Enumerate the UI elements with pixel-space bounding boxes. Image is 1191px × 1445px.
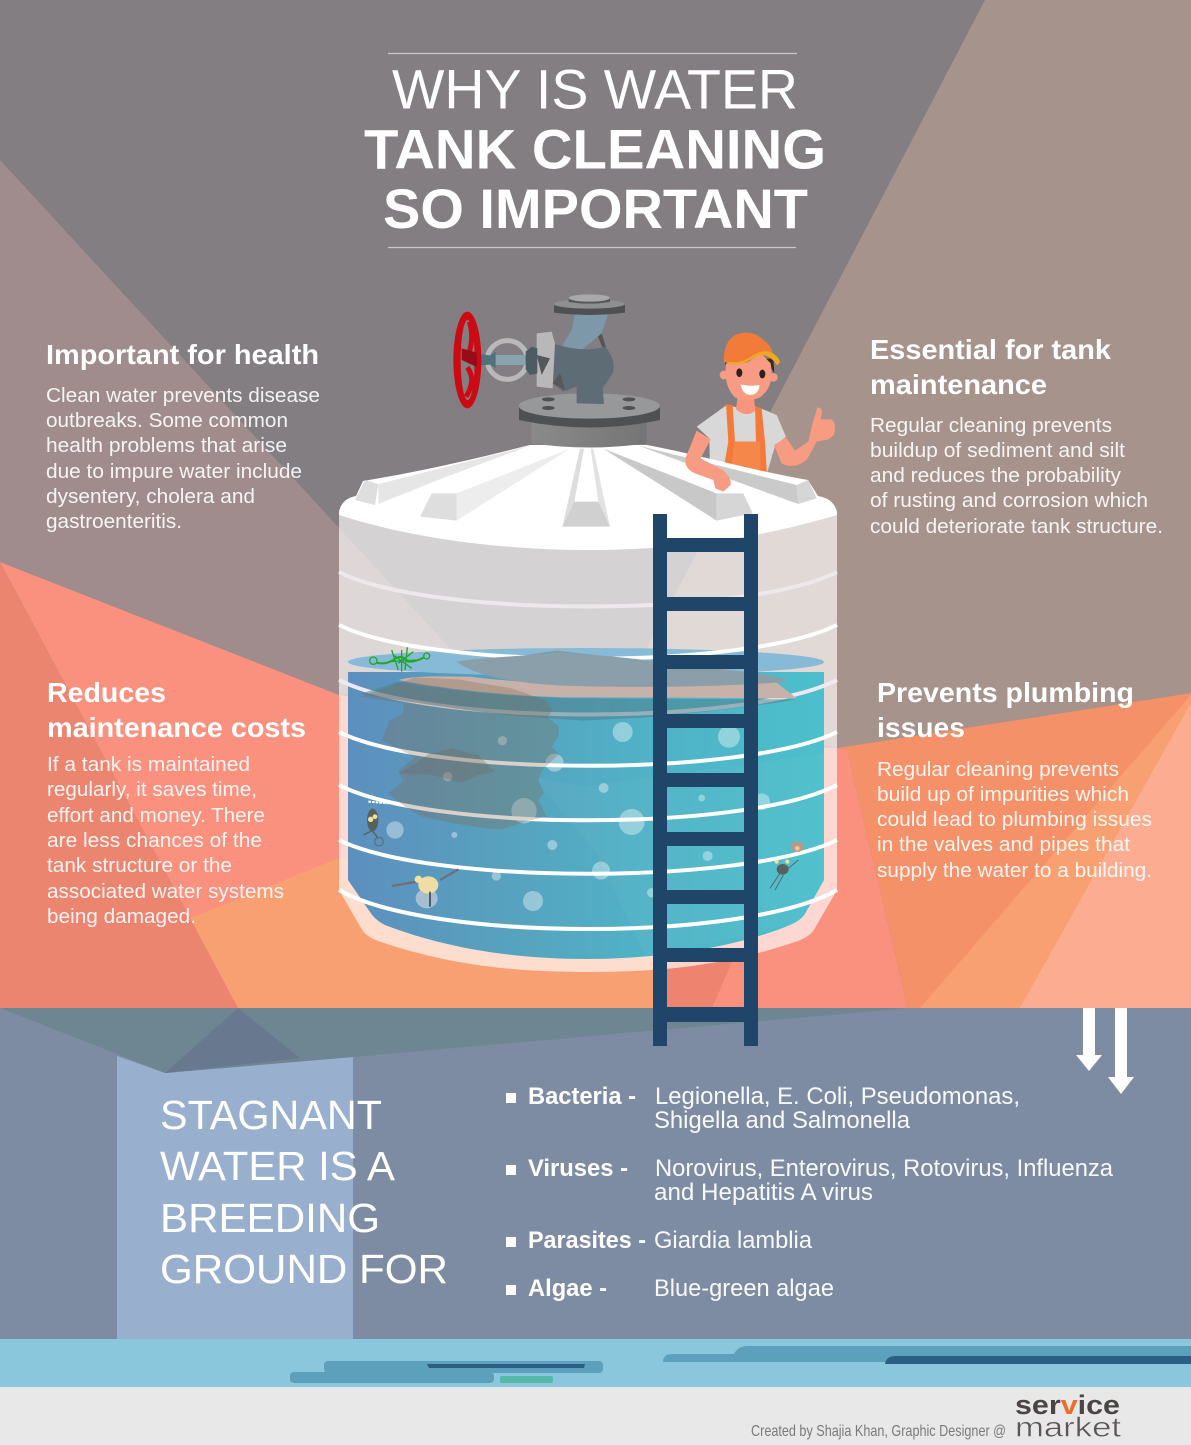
heading: stagnant water: STAGNANT [160,1092,382,1138]
water surface ellipse [348,648,824,676]
neck [736,398,755,414]
title block: WHY IS WATER [392,58,798,120]
smile [741,384,760,395]
logo: service market [1015,1390,1121,1442]
title block [364,54,826,248]
bubbles [386,722,770,911]
text block: essential for tank maintenance: of rusting and corrosion which [870,489,1148,512]
cap [724,333,773,363]
item: bacteria: Legionella, E. Coli, Pseudomonas, [655,1083,1020,1110]
arrows pointing down [1076,1008,1134,1094]
footer band [0,1387,1191,1445]
tank illustration [339,294,837,1046]
text block: essential for tank maintenance: buildup of sediment and silt [870,439,1125,462]
text block: reduces maintenance costs: are less chances of the [47,829,262,852]
title block: TANK CLEANING [364,118,826,180]
text block: prevents plumbing issues: build up of impurities which [877,783,1129,806]
text block: important for health: dysentery, cholera and [46,485,255,508]
item: algae: Blue-green algae [654,1275,834,1302]
ladder [653,514,758,1046]
water lighter facet [533,753,824,958]
stem [495,355,528,365]
text block: reduces maintenance costs: regularly, it saves time, [47,778,257,801]
overall straps and bib [723,404,767,480]
sediment and dirt in the water [360,651,797,829]
text block: essential for tank maintenance: maintenance [870,369,1047,400]
item: viruses: Norovirus, Enterovirus, Rotovirus, Influenza [655,1155,1114,1182]
tank ribs: white rings [339,572,837,929]
list: contaminants [506,1083,1114,1302]
item: parasites: Parasites - [528,1227,646,1254]
heading: stagnant water: BREEDING [160,1195,380,1241]
text block: essential for tank maintenance: Regular cleaning prevents [870,414,1112,437]
logo: service market: service [1015,1390,1120,1420]
text block: essential for tank maintenance: could deteriorate tank structure. [870,515,1163,538]
text block: prevents plumbing issues: Prevents plumbing [877,677,1134,708]
inner sediment blob [398,748,495,783]
gland and bracket [537,332,555,388]
text block: important for health: Important for health [46,339,319,370]
title block: SO IMPORTANT [383,177,808,240]
text block: important for health: health problems that arise [46,434,287,457]
text block: reduces maintenance costs [47,677,306,928]
dark band [360,682,797,721]
text block: important for health: gastroenteritis. [46,510,182,533]
text block: essential for tank maintenance [870,334,1163,538]
item: parasites [506,1227,813,1254]
shirt [697,405,786,477]
item: bacteria: Bacteria - [528,1083,636,1110]
upper pipe [562,313,608,350]
water strip with blocks [0,1339,1191,1387]
lower section background [0,1008,1191,1340]
icon: green algae [370,647,430,672]
left arm and hand [685,431,731,492]
text block: reduces maintenance costs: tank structure or the [47,854,232,877]
footer credit: Created by Shajia Khan, Graphic Designer @ [751,1423,1006,1440]
water body [348,672,824,959]
hand wheel [453,312,481,408]
heading: stagnant water: GROUND FOR [160,1246,448,1292]
item: parasites: Giardia lamblia [654,1227,813,1254]
lid ribs [355,446,817,527]
text block: important for health [46,339,320,533]
text block: reduces maintenance costs: If a tank is maintained [47,753,250,776]
worker head and front arm [685,333,780,492]
cap brim [727,351,780,366]
icon: mosquito bottom [392,869,458,908]
item: bacteria [506,1083,1020,1134]
tank lid [339,445,837,550]
text block: reduces maintenance costs: maintenance costs [47,712,306,743]
text block: reduces maintenance costs: associated water systems [47,880,284,903]
icon: mosquito left [363,802,388,846]
top flange and cap [554,304,625,315]
text block: prevents plumbing issues: issues [877,712,965,743]
text block: essential for tank maintenance: and reduces the probability [870,464,1122,487]
text block: prevents plumbing issues: supply the water to a building. [877,859,1152,882]
right arm with thumbs up [774,407,835,466]
eyes [736,368,742,377]
ears [720,371,728,379]
text block: prevents plumbing issues: Regular cleaning prevents [877,758,1119,781]
large sediment blob [360,677,559,829]
face [726,353,772,400]
item: viruses: Viruses - [528,1155,628,1182]
item: algae: Algae - [528,1275,607,1302]
hair [725,358,774,373]
text block: prevents plumbing issues: could lead to plumbing issues [877,808,1152,831]
icon: mosquito right [770,841,804,890]
rim tint over first ring [527,651,743,664]
text block: important for health: due to impure water include [46,460,302,483]
text block: reduces maintenance costs: effort and money. There [47,804,265,827]
tank body [339,510,837,972]
text block: reduces maintenance costs: being damaged. [47,905,196,928]
valve body [553,343,614,404]
logo: service market: market [1015,1412,1121,1442]
background: polygon facets [0,0,1191,1010]
surface film [457,652,788,687]
support strut [598,330,607,352]
base flange [519,406,660,427]
item: bacteria: Shigella and Salmonella [654,1107,911,1134]
item: viruses: and Hepatitis A virus [654,1179,873,1206]
text block: important for health: outbreaks. Some common [46,409,288,432]
tan band [398,676,797,698]
text block: prevents plumbing issues: in the valves and pipes that [877,833,1130,856]
ring yoke [487,341,527,379]
text block: reduces maintenance costs: Reduces [47,677,166,708]
item: algae [506,1275,834,1302]
valve assembly [453,294,660,447]
text block: prevents plumbing issues [877,677,1152,882]
item: viruses [506,1155,1114,1206]
text block: important for health: Clean water prevents disease [46,384,320,407]
worker body behind lid [697,398,835,480]
neck cylinder [532,422,647,447]
heading: stagnant water [160,1092,448,1292]
heading: stagnant water: WATER IS A [160,1143,396,1189]
text block: essential for tank maintenance: Essential for tank [870,334,1111,365]
